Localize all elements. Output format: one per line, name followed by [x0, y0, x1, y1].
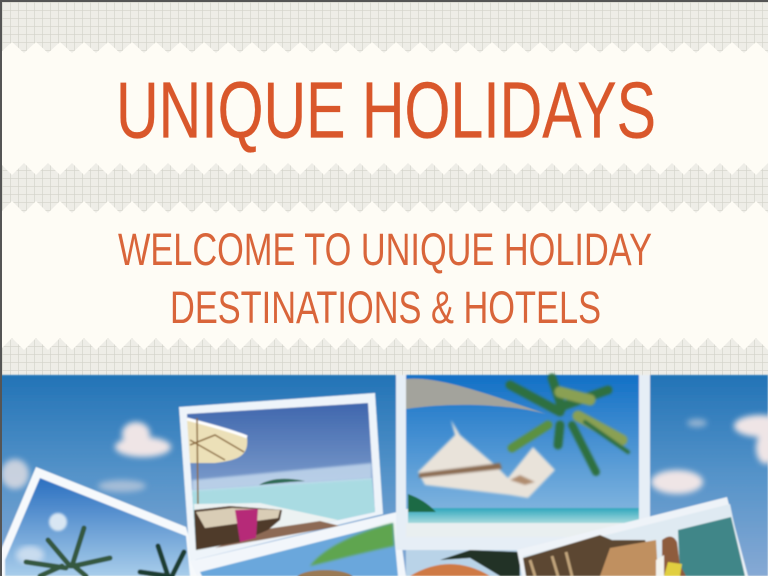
- photo: hammock: [396, 375, 650, 550]
- palm leaf: [310, 523, 394, 566]
- thatch roof: [297, 570, 353, 576]
- subtitle: DESTINATIONS & HOTELS: [170, 282, 601, 333]
- photo: couple on deck: [517, 497, 748, 576]
- hammock net: [418, 420, 555, 498]
- patterned band: top: [0, 0, 768, 53]
- sky background: [0, 375, 768, 576]
- photo: palm trees: [0, 467, 200, 576]
- photo: green palm bottom centre: [190, 512, 406, 576]
- island: [259, 479, 305, 485]
- patterned band: bottom: [0, 338, 768, 376]
- horizon clouds: [192, 463, 372, 491]
- orange roof: [410, 564, 490, 576]
- deck roof: [523, 535, 658, 576]
- patterned band: middle: [0, 163, 768, 213]
- trees: [440, 550, 520, 576]
- photo collage: [0, 375, 768, 576]
- photo: hut: [406, 550, 526, 576]
- palm crown: [510, 378, 628, 472]
- subtitle: [118, 224, 652, 333]
- water and sand: [408, 508, 639, 523]
- sand: [194, 503, 338, 551]
- couple: [662, 536, 686, 576]
- islet: [408, 494, 436, 512]
- palm fronds: [26, 528, 110, 576]
- photo: beach lounger: [179, 393, 383, 561]
- clouds: [1, 415, 768, 494]
- parasol: [187, 419, 247, 463]
- pink towel: [235, 509, 258, 542]
- trunk: [406, 379, 546, 414]
- sea: [678, 517, 745, 576]
- lounger: [194, 506, 282, 550]
- sea: [192, 478, 375, 551]
